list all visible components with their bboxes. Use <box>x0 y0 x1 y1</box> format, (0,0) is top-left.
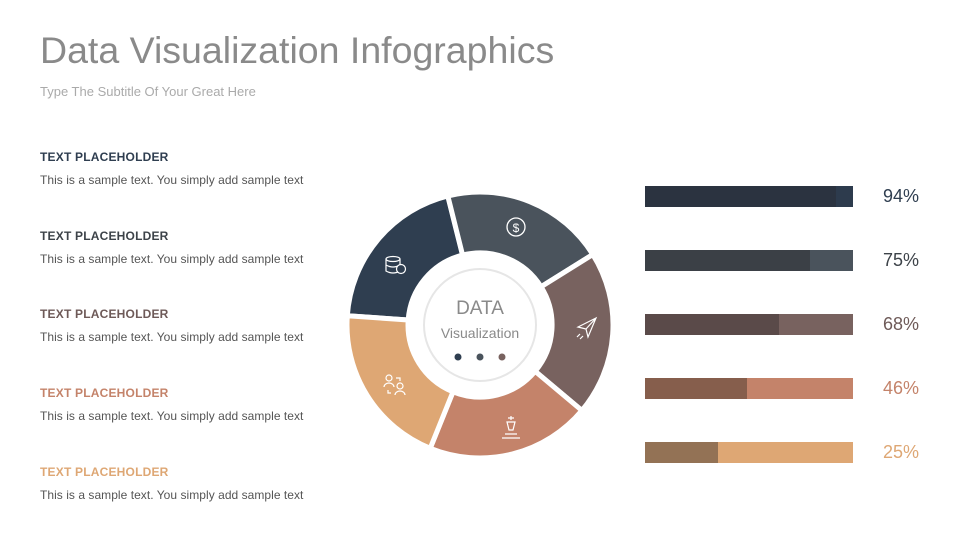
bar chart: 75% <box>883 250 919 270</box>
icon: paper plane <box>577 318 596 339</box>
segment slate <box>448 192 593 287</box>
text block 3: This is a sample text. You simply add sample text <box>40 330 303 344</box>
text block 4: TEXT PLACEHOLDER <box>40 386 169 400</box>
text block 1: This is a sample text. You simply add sample text <box>40 173 303 187</box>
icon: database <box>386 256 406 274</box>
center circle: DATA <box>456 298 504 319</box>
bar chart: 68% <box>883 314 919 334</box>
segment navy <box>347 196 463 320</box>
bar chart: 46% <box>883 378 919 398</box>
icon: chess piece <box>502 416 520 438</box>
text block 2: This is a sample text. You simply add sample text <box>40 252 303 266</box>
bar chart: 94% <box>883 186 919 206</box>
bar 75% <box>645 250 853 271</box>
bar 94% <box>645 186 853 207</box>
text block 4 <box>40 386 304 423</box>
text block 5: This is a sample text. You simply add sample text <box>40 488 303 502</box>
icon: users exchange <box>384 375 405 395</box>
text block 5: TEXT PLACEHOLDER <box>40 465 169 479</box>
icon: dollar <box>507 218 525 236</box>
bar 25% <box>645 442 853 463</box>
text block 1: TEXT PLACEHOLDER <box>40 150 169 164</box>
bar chart: 25% <box>883 442 919 462</box>
segment terracotta <box>430 371 582 458</box>
center circle: Visualization <box>441 325 519 341</box>
bar chart <box>645 186 919 463</box>
title: Data Visualization Infographics <box>40 29 554 71</box>
segment mauve <box>535 254 613 410</box>
text block 4: This is a sample text. You simply add sample text <box>40 409 303 423</box>
subtitle: Type The Subtitle Of Your Great Here <box>40 84 256 99</box>
text block 1 <box>40 150 304 187</box>
text block 3 <box>40 307 304 344</box>
bar 46% <box>645 378 853 399</box>
center circle <box>424 269 536 381</box>
bar 68% <box>645 314 853 335</box>
text block 2 <box>40 229 304 266</box>
text block 2: TEXT PLACEHOLDER <box>40 229 169 243</box>
icon: dollar: $ <box>513 221 520 235</box>
text block 5 <box>40 465 304 502</box>
text block 3: TEXT PLACEHOLDER <box>40 307 169 321</box>
segment tan <box>347 316 453 448</box>
